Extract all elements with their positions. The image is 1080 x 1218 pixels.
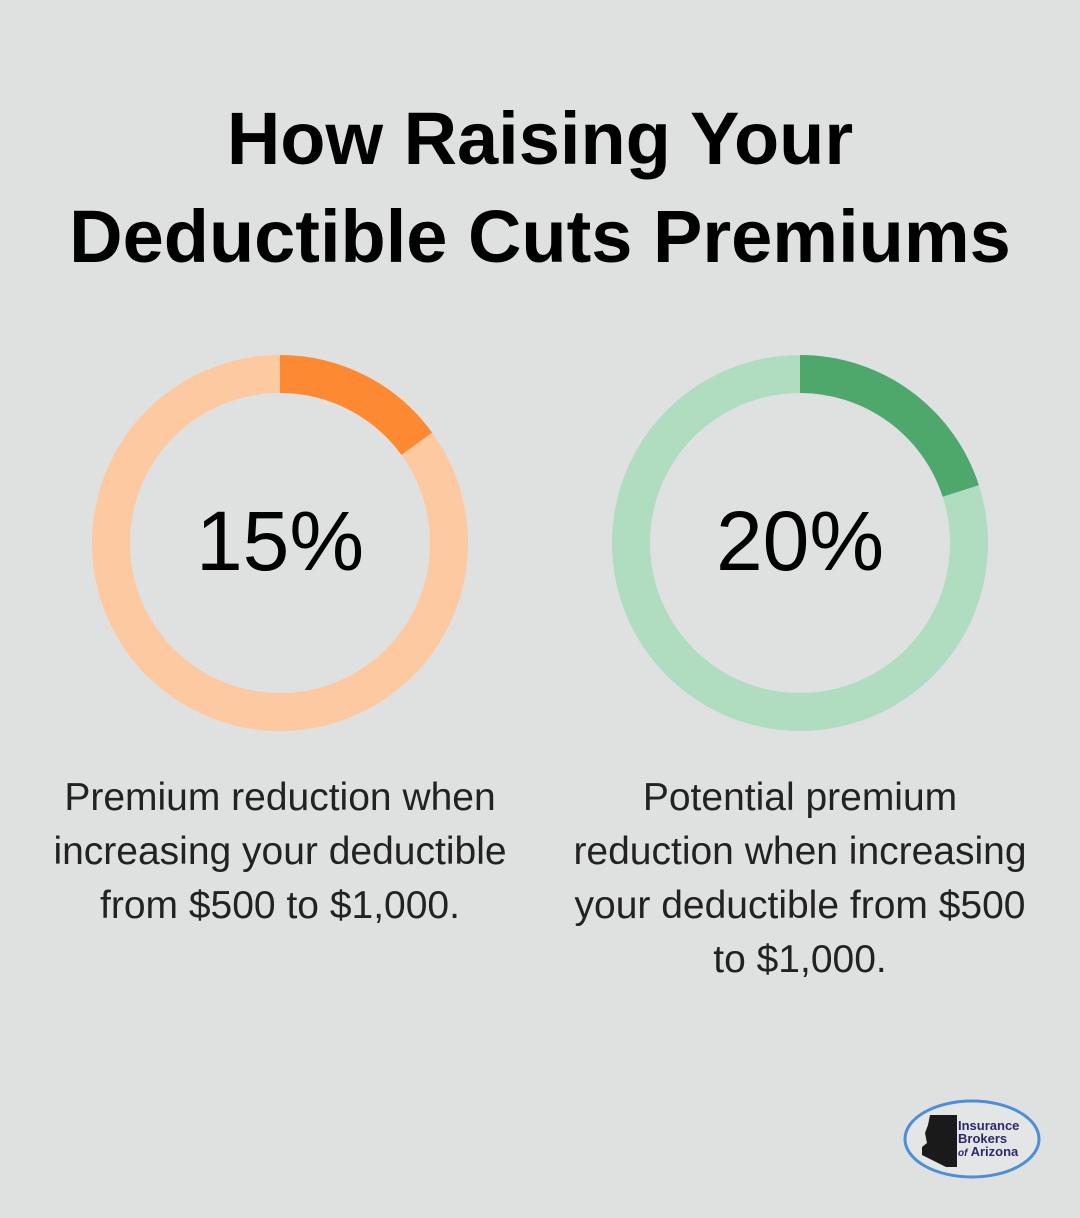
title: Deductible Cuts Premiums (69, 195, 1011, 278)
text: right description: reduction when increasing (573, 830, 1027, 873)
donut chart: 20%: 20% (716, 494, 884, 588)
text: left description: from $500 to $1,000. (100, 884, 460, 927)
logo: Brokers (958, 1131, 1007, 1146)
logo: Insurance (958, 1118, 1019, 1133)
title (69, 97, 1011, 278)
text: left description: Premium reduction when (64, 776, 496, 819)
logo (904, 1100, 1040, 1178)
text: right description: Potential premium (643, 776, 957, 819)
text: right description (573, 776, 1027, 981)
donut chart: 15% (92, 355, 468, 731)
text: left description: increasing your deductible (53, 830, 507, 873)
text: right description: to $1,000. (713, 938, 887, 981)
text: right description: your deductible from $500 (575, 884, 1025, 927)
logo: of Arizona (958, 1144, 1019, 1159)
title: How Raising Your (227, 97, 853, 180)
text: left description (53, 776, 507, 927)
donut chart: 20% (612, 355, 988, 731)
donut chart: 15%: 15% (196, 494, 364, 588)
